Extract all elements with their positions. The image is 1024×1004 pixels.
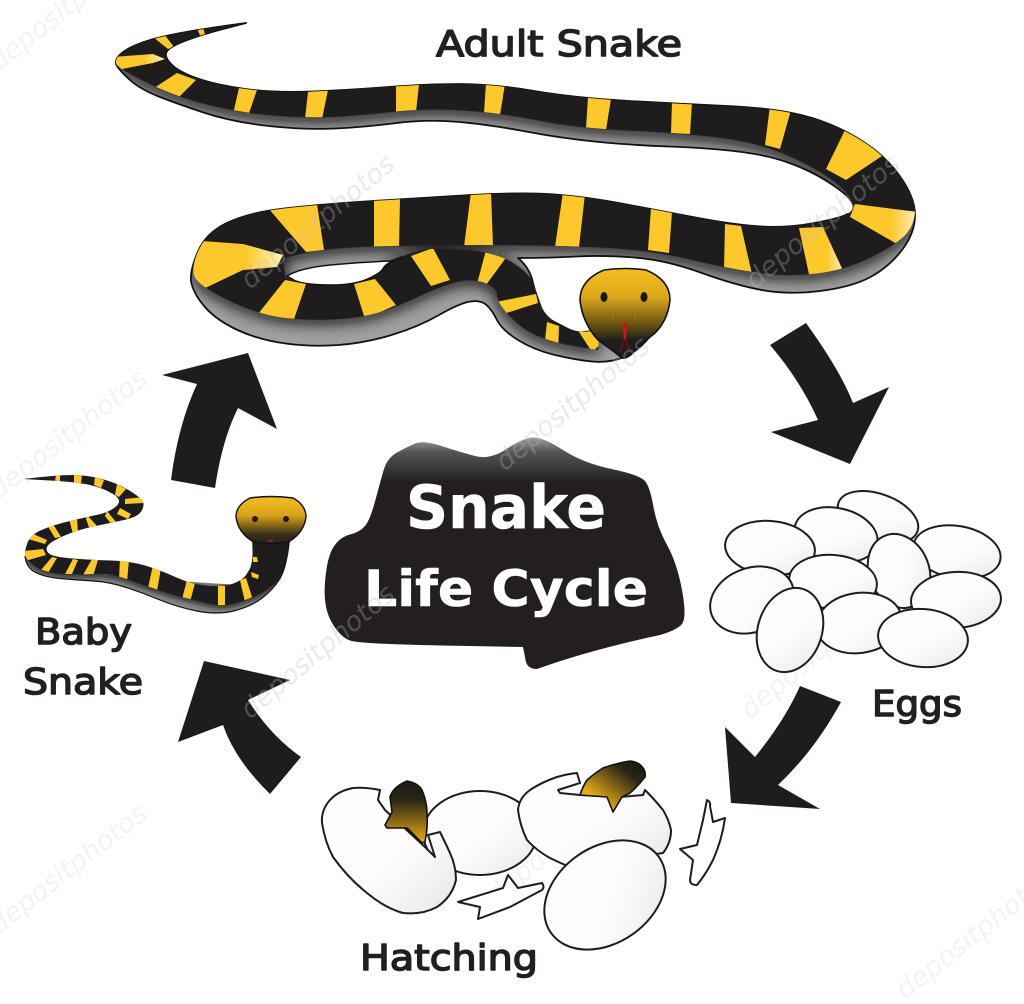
adult snake head xyxy=(580,268,670,358)
baby snake underside xyxy=(24,542,290,614)
watermark on blob: depositphotos xyxy=(490,331,656,477)
watermark near blob: depositphotos xyxy=(235,579,401,725)
arrow: adult to eggs xyxy=(770,323,889,464)
arrow: hatching to baby snake xyxy=(178,661,301,794)
adult snake xyxy=(112,23,918,362)
label: Baby Snake: Baby xyxy=(35,612,132,653)
baby snake xyxy=(23,474,306,613)
baby snake back xyxy=(23,475,290,605)
adult snake underside shading xyxy=(116,23,915,362)
watermark over adult snake: depositphotos xyxy=(235,149,401,295)
heading: Adult Snake: Adult Snake xyxy=(436,24,682,65)
adult snake back xyxy=(116,23,915,350)
broken egg with left hatchling xyxy=(322,781,456,913)
center title panel xyxy=(325,331,684,669)
front egg xyxy=(523,818,687,972)
label: Baby Snake: Snake xyxy=(23,662,143,703)
hatching eggs xyxy=(322,761,725,972)
title line 1: Snake xyxy=(406,473,606,543)
loop gap xyxy=(287,257,402,285)
eggs cluster xyxy=(701,481,1005,681)
adult snake yellow bands xyxy=(112,27,918,352)
watermark over adult snake xyxy=(235,149,906,295)
watermark over adult snake: depositphotos xyxy=(740,149,906,295)
watermark: depositphotos xyxy=(735,579,901,725)
label: Hatching: Hatching xyxy=(360,938,538,979)
title line 2: Life Cycle xyxy=(364,560,648,618)
arrow: baby snake to adult xyxy=(162,353,277,488)
broken egg with right hatchling xyxy=(518,761,671,867)
back egg xyxy=(423,791,537,875)
shell fragment right xyxy=(680,800,725,885)
label: Baby Snake xyxy=(23,612,143,703)
title blob xyxy=(325,437,684,669)
baby snake head xyxy=(236,496,306,544)
label: Eggs: Eggs xyxy=(872,684,962,725)
shell fragment bottom xyxy=(458,875,544,919)
watermark: depositphotos xyxy=(480,768,650,911)
arrow: eggs to hatching xyxy=(725,686,841,809)
baby snake bands xyxy=(24,474,259,608)
